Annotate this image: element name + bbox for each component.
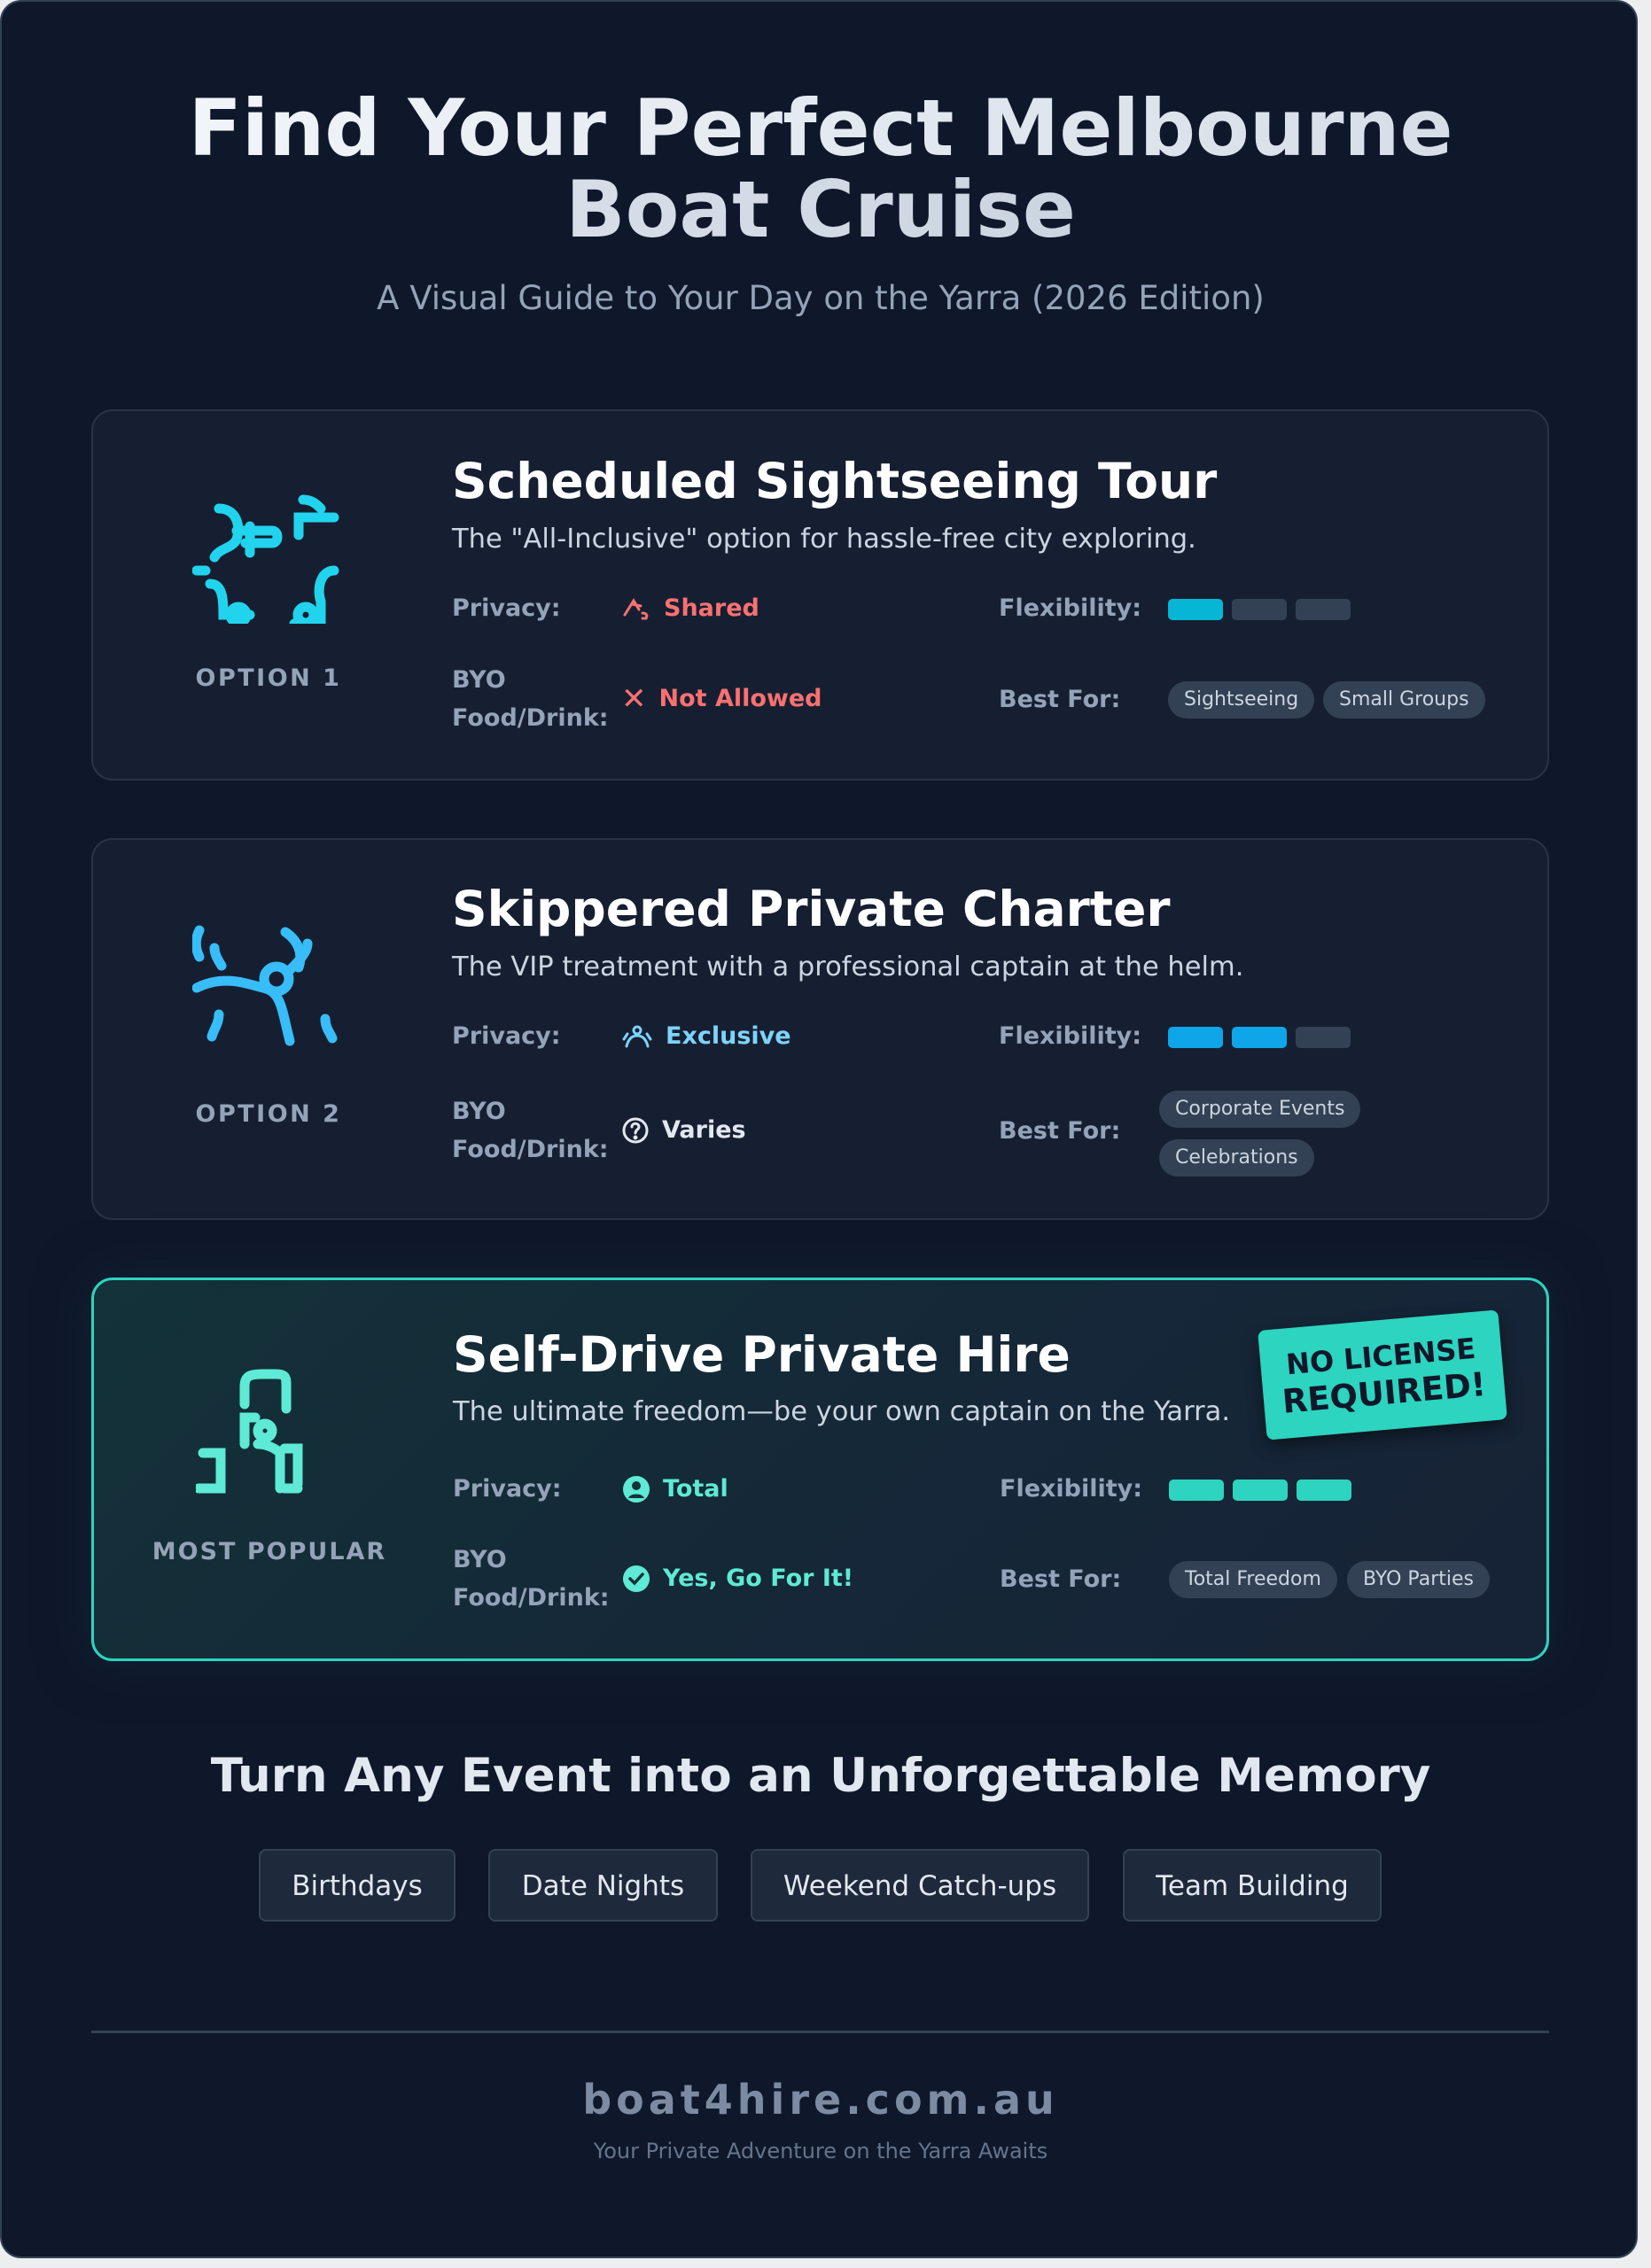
- best for: Best For:: [999, 686, 1120, 713]
- byo row: [452, 666, 609, 732]
- panel: option 2: [91, 838, 1549, 1220]
- icon: captain: [192, 925, 337, 1045]
- tags: Corporate Events: [1175, 1098, 1344, 1120]
- panel: option 3 (most popular): BYO Parties: [1363, 1568, 1474, 1590]
- description: The VIP treatment with a professional captain at the helm.: [452, 951, 1243, 983]
- description: The "All-Inclusive" option for hassle-free city exploring.: [452, 524, 1196, 555]
- panel: option 3 (most popular): [91, 1278, 1549, 1661]
- privacy row: Privacy:: [453, 1475, 562, 1503]
- value: not allowed: Not Allowed: [659, 685, 822, 712]
- value: total: Total: [663, 1475, 728, 1503]
- byo row: [452, 1098, 609, 1163]
- value: not allowed: [621, 681, 822, 717]
- badge: no license required: NO LICENSE: [1285, 1332, 1477, 1381]
- pills: events: Date Nights: [522, 1870, 684, 1902]
- tags: Total Freedom: [1185, 1568, 1321, 1590]
- icon: steering person: [196, 1370, 303, 1494]
- byo row: BYO: [453, 1546, 507, 1573]
- byo row: BYO: [452, 1098, 506, 1125]
- footer brand: boat4hire.com.au: [582, 2076, 1059, 2124]
- bars: 3 of 3: [1169, 1480, 1351, 1501]
- byo row: Food/Drink:: [452, 1136, 609, 1163]
- byo row: BYO: [452, 666, 506, 694]
- title: [188, 82, 1453, 255]
- flexibility: Flexibility:: [999, 594, 1141, 622]
- best for: Best For:: [999, 1117, 1120, 1145]
- badge: no license required: REQUIRED!: [1281, 1365, 1487, 1421]
- best for: Best For:: [1000, 1565, 1121, 1593]
- value: yes: Yes, Go For It!: [663, 1565, 853, 1592]
- tags: [1168, 681, 1314, 718]
- value: not allowed: ✕: [621, 681, 647, 717]
- panel: option 1: Small Groups: [1339, 688, 1469, 711]
- label: option 1: OPTION 1: [196, 664, 341, 692]
- bars: 2 of 3: [1168, 1027, 1351, 1048]
- heading: Scheduled Sightseeing Tour: [452, 453, 1217, 509]
- pills: events: Weekend Catch-ups: [783, 1870, 1056, 1902]
- panel: option 2: Celebrations: [1175, 1146, 1298, 1169]
- heading: Skippered Private Charter: [452, 881, 1170, 937]
- value: varies: Varies: [662, 1116, 746, 1144]
- flexibility: Flexibility:: [999, 1022, 1141, 1050]
- value: shared: Shared: [664, 594, 759, 622]
- description: The ultimate freedom—be your own captain on the Yarra.: [453, 1396, 1230, 1427]
- icon: bus: [192, 494, 339, 624]
- privacy row: Privacy:: [452, 594, 561, 622]
- heading: Self-Drive Private Hire: [453, 1326, 1071, 1383]
- pills: events: Team Building: [1156, 1870, 1349, 1902]
- privacy row: Privacy:: [452, 1022, 561, 1050]
- footer tagline: Your Private Adventure on the Yarra Awaits: [594, 2139, 1047, 2163]
- tags: [1159, 1091, 1360, 1128]
- badge: no license required: [1258, 1309, 1507, 1441]
- value: total: [623, 1475, 728, 1503]
- label: most popular: MOST POPULAR: [152, 1538, 386, 1565]
- flexibility: Flexibility:: [1000, 1475, 1142, 1503]
- byo row: Food/Drink:: [452, 704, 609, 732]
- byo row: Food/Drink:: [453, 1584, 610, 1612]
- section heading: Turn Any Event into an Unforgettable Memory: [211, 1749, 1430, 1803]
- pills: events: Birthdays: [292, 1870, 423, 1902]
- value: varies: [622, 1116, 746, 1144]
- label: option 2: OPTION 2: [196, 1100, 341, 1128]
- tags: [1169, 1561, 1337, 1598]
- title: Boat Cruise: [565, 164, 1076, 255]
- title: Find Your Perfect Melbourne: [188, 82, 1453, 174]
- tags: Sightseeing: [1184, 688, 1298, 711]
- value: exclusive: Exclusive: [666, 1022, 791, 1050]
- panel: option 1: [91, 409, 1549, 781]
- byo row: [453, 1546, 610, 1612]
- subtitle: A Visual Guide to Your Day on the Yarra (2026 Edition): [377, 279, 1265, 317]
- bars: 1 of 3: [1168, 599, 1351, 620]
